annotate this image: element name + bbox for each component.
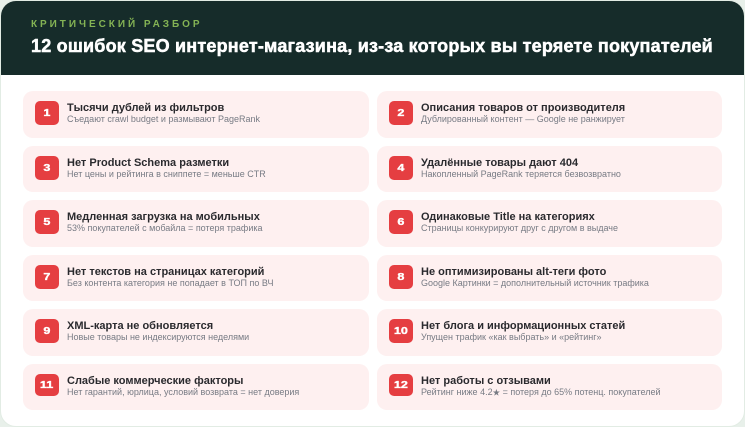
card 5: 53% покупателей с мобайла = потеря трафика: [67, 223, 263, 233]
card 2: Дублированный контент — Google не ранжирует: [421, 114, 625, 124]
card 7: [23, 255, 369, 301]
card 10: Нет блога и информационных статей: [421, 320, 625, 332]
header band: [1, 1, 744, 75]
card 7: Без контента категория не попадает в ТОП по ВЧ: [67, 278, 274, 288]
card 12: Рейтинг ниже 4.2★ = потеря до 65% потенц. покупателей: [421, 387, 661, 397]
card 4: Удалённые товары дают 404: [421, 157, 578, 169]
card 2: [377, 91, 722, 138]
card 8: 8: [397, 271, 405, 283]
card 11: [23, 364, 369, 410]
card 9: [23, 309, 369, 356]
card 4: 4: [397, 162, 405, 174]
card 8: [377, 255, 722, 301]
card 5: 5: [43, 216, 51, 228]
card 7: Нет текстов на страницах категорий: [67, 266, 264, 278]
card 12: Нет работы с отзывами: [421, 375, 551, 387]
card 9: 9: [43, 325, 51, 337]
kicker: КРИТИЧЕСКИЙ РАЗБОР: [31, 19, 202, 30]
card 12: [377, 364, 722, 410]
card 5: Медленная загрузка на мобильных: [67, 211, 260, 223]
card 9: Новые товары не индексируются неделями: [67, 332, 249, 342]
card 1: 1: [43, 107, 51, 119]
card 11: 11: [40, 379, 54, 391]
card 6: [377, 200, 722, 247]
card 3: Нет Product Schema разметки: [67, 157, 229, 169]
card 6: Одинаковые Title на категориях: [421, 211, 595, 223]
card 5: [23, 200, 369, 247]
card 10: Упущен трафик «как выбрать» и «рейтинг»: [421, 332, 602, 342]
card 8: Не оптимизированы alt-теги фото: [421, 266, 606, 278]
title: 12 ошибок SEO интернет-магазина, из-за которых вы теряете покупателей: [31, 36, 713, 56]
card 11: Нет гарантий, юрлица, условий возврата = нет доверия: [67, 387, 299, 397]
card 8: Google Картинки = дополнительный источник трафика: [421, 278, 649, 288]
card 4: [377, 146, 722, 192]
card 9: XML-карта не обновляется: [67, 320, 213, 332]
card 10: [377, 309, 722, 356]
card 12: 12: [394, 379, 408, 391]
card 11: Слабые коммерческие факторы: [67, 375, 243, 387]
card 6: Страницы конкурируют друг с другом в выдаче: [421, 223, 618, 233]
card 4: Накопленный PageRank теряется безвозвратно: [421, 169, 621, 179]
card 1: Тысячи дублей из фильтров: [67, 102, 224, 114]
card 7: 7: [43, 271, 51, 283]
card 2: Описания товаров от производителя: [421, 102, 625, 114]
card 3: 3: [43, 162, 51, 174]
card 2: 2: [397, 107, 405, 119]
card 1: Съедают crawl budget и размывают PageRank: [67, 114, 260, 124]
card 3: Нет цены и рейтинга в сниппете = меньше CTR: [67, 169, 266, 179]
card 10: 10: [394, 325, 408, 337]
card 3: [23, 146, 369, 192]
card 1: [23, 91, 369, 138]
card 6: 6: [397, 216, 405, 228]
